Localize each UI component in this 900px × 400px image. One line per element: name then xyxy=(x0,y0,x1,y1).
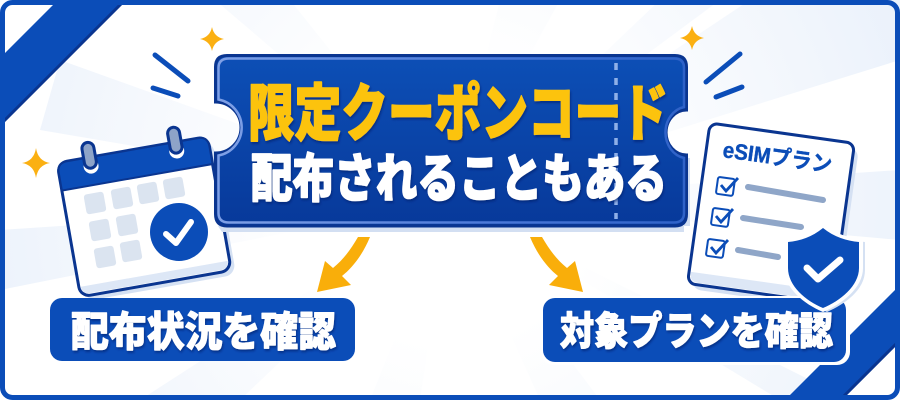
accent lines: left xyxy=(153,55,188,96)
icon: calendar xyxy=(54,121,236,302)
heading: limited coupon code: 限定クーポンコード xyxy=(248,80,668,149)
ribbon: bottom-right corner xyxy=(785,285,900,400)
icon: shield with check xyxy=(784,224,865,312)
sparkle: top right xyxy=(680,26,704,50)
label: eSIM plan: eSIMプラン xyxy=(721,137,834,177)
sparkle: top left xyxy=(200,27,224,51)
panel: coupon ticket xyxy=(216,56,690,232)
icon: eSIM plan document xyxy=(687,123,860,309)
pill: check eligible plans: 対象プランを確認 xyxy=(560,311,833,354)
pill: check eligible plans xyxy=(541,296,850,365)
sparkle: left xyxy=(22,148,50,178)
accent lines: right xyxy=(706,54,742,97)
plan checklist xyxy=(706,177,823,258)
arrow: to right action xyxy=(530,237,583,292)
pill: check distribution status xyxy=(50,298,355,361)
pill: check distribution status: 配布状況を確認 xyxy=(71,309,336,355)
arrow: to left action xyxy=(317,237,370,292)
heading: may be distributed: 配布されることもある xyxy=(251,151,667,209)
ribbon: top-left corner xyxy=(0,0,125,125)
